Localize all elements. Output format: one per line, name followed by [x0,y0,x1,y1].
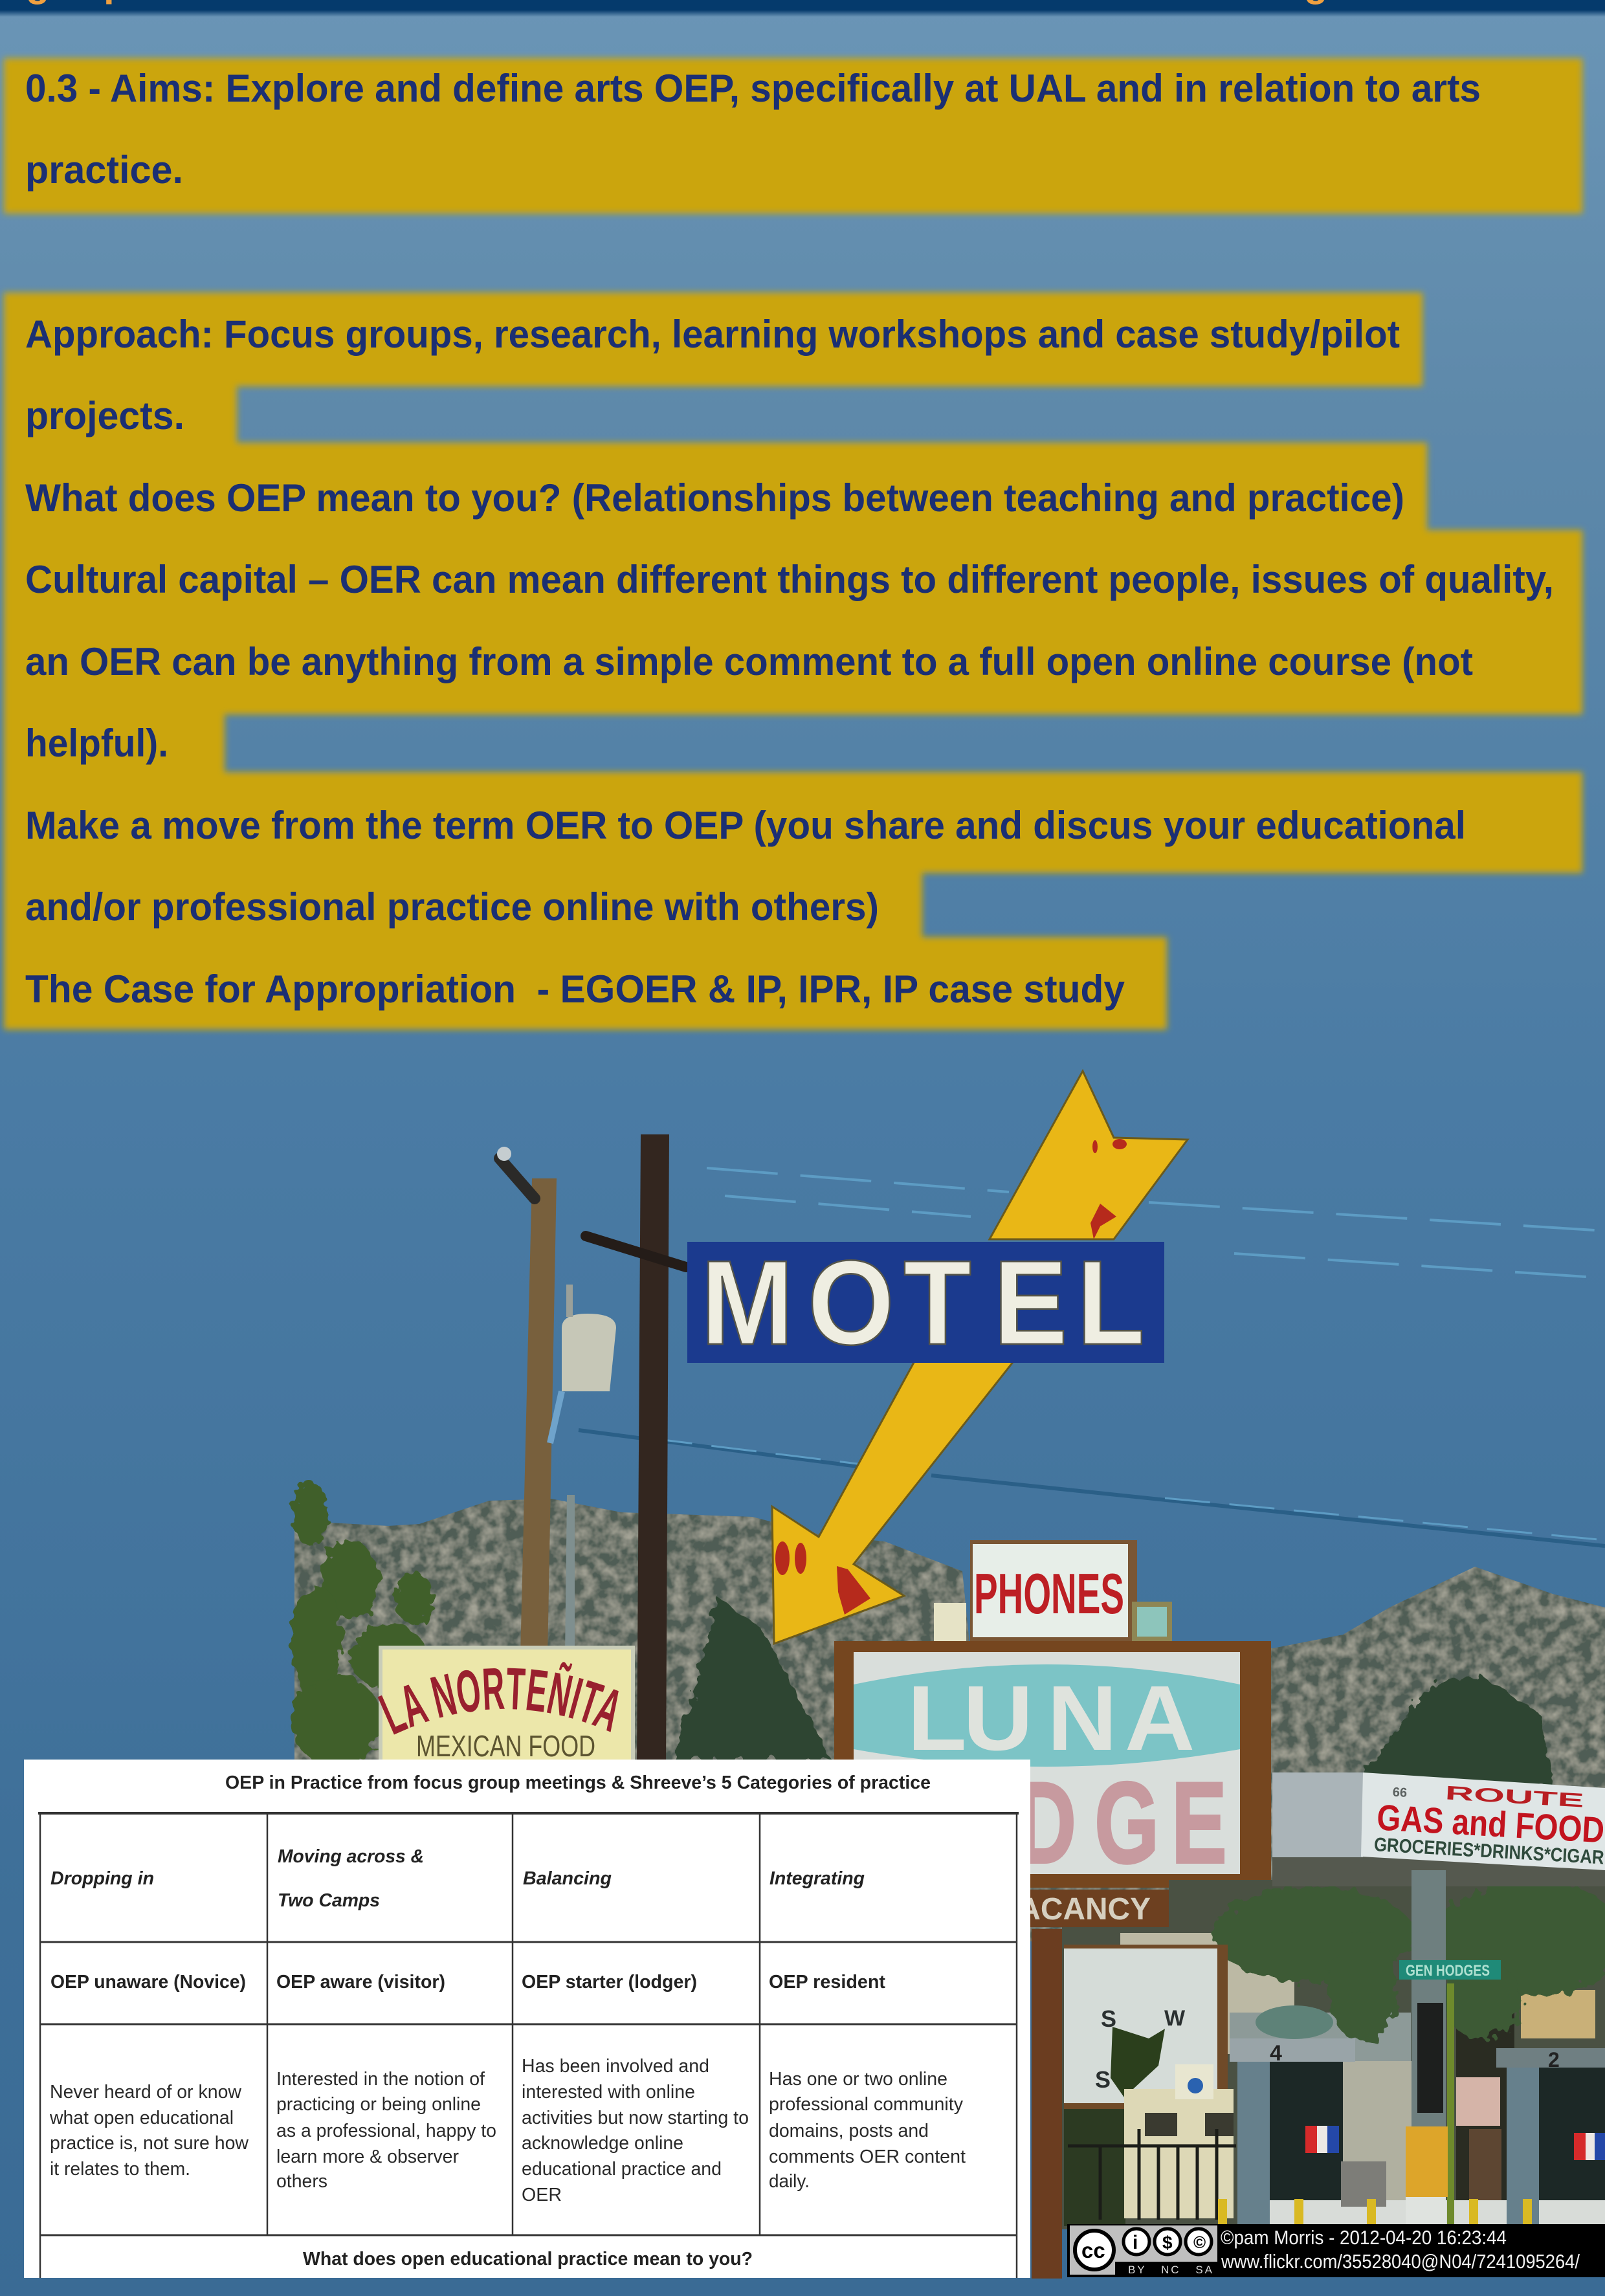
text block: approach: an OER can be anything from a simple comment to a full open online course (not [25,640,1473,683]
text block: approach: Approach: Focus groups, research, learning workshops and case study/pilot [25,313,1400,356]
motel sign: MOTEL [701,1235,1145,1369]
pump 2 [1496,2048,1605,2249]
yellow highlight blocks [4,58,1582,1030]
credit bar: © [1193,2233,1206,2252]
column text: aware: Interested in the notion of [276,2069,485,2090]
row: categories: Moving across & [278,1846,424,1867]
table title: OEP in Practice from focus group meetings & Shreeve’s 5 Categories of practice [225,1772,931,1793]
phones sign [934,1540,1172,1641]
luna lodge sign: LUNA [907,1667,1195,1770]
conifers behind signs [673,1598,1553,1786]
text block: approach: What does OEP mean to you? (Relationships between teaching and practice) [25,476,1404,520]
photo: roadside motel scene [289,1069,1605,2279]
trees behind gas station [1213,1880,1605,2042]
transformer [550,1285,616,1443]
text block: approach [25,313,1554,1011]
row: categories: Balancing [523,1868,612,1889]
gas station canopy [1272,1772,1605,1886]
la nortenita sign: LA NORTEÑITA [378,1662,619,1734]
caravan and fence [1068,2064,1236,2220]
top band with clipped heading [0,0,1605,17]
column text: starter: educational practice and [522,2159,722,2180]
column text: starter [522,2056,749,2205]
luna lodge sign: LODGE [841,1758,1227,1887]
panel: OEP in practice table [24,1760,1030,2278]
text block: approach: The Case for Appropriation - EGOER & IP, IPR, IP case study [25,967,1125,1011]
column text: aware: others [276,2171,327,2192]
street sign and centre props [1341,1960,1501,2226]
rust marks [775,1139,1127,1615]
canopy column [1411,1870,1446,2136]
row: categories: Integrating [769,1868,865,1889]
gas station canopy: ROUTE [1444,1782,1584,1812]
gas station canopy: 66 [1392,1785,1408,1800]
credit bar [1067,2224,1605,2277]
street lamp [565,1495,575,1657]
column text: unaware: it relates to them. [50,2159,190,2180]
white billboard: S [1101,2005,1116,2032]
text block: aims: 0.3 - Aims: Explore and define arts OEP, specifically at UAL and in relation to arts [25,67,1481,110]
left tree foliage [291,1482,434,1767]
column text: resident: comments OER content [769,2147,966,2167]
column text: resident: daily. [769,2171,810,2192]
text block: approach: Make a move from the term OER to OEP (you share and discus your educational [25,804,1466,847]
row: OEP levels [50,1972,885,1992]
white billboard: W [1164,2006,1186,2031]
phones sign: PHONES [974,1562,1124,1626]
column text: starter: interested with online [522,2082,695,2103]
white curb [1270,2200,1605,2225]
wires [579,1168,1605,1546]
arrow upper [990,1071,1188,1239]
row: OEP levels: OEP unaware (Novice) [50,1972,246,1992]
column text: starter: Has been involved and [522,2056,709,2077]
column text: unaware: practice is, not sure how [50,2133,249,2154]
row: categories [50,1846,865,1911]
credit bar: BY NC SA [1128,2264,1213,2276]
white billboard [1064,1945,1228,2109]
pump 4: 4 [1270,2041,1282,2066]
telephone pole [520,1178,557,1657]
column text: unaware [49,2082,249,2180]
text block: approach: Cultural capital – OER can mean different things to different people, issues of quality, [25,558,1554,601]
vacancy sign: VACANCY [1000,1892,1151,1926]
column text: resident [769,2069,966,2192]
text block: aims: practice. [25,148,183,192]
column text: aware: learn more & observer [276,2147,459,2167]
row: OEP levels: OEP aware (visitor) [276,1972,445,1992]
credit bar: $ [1162,2233,1173,2253]
brown post [1032,1929,1062,2279]
yellow bollards [1218,2199,1532,2226]
pump 4 [1230,2005,1355,2246]
credit bar: cc [1081,2238,1105,2262]
row: categories: Two Camps [278,1890,380,1911]
pump 2: 2 [1548,2048,1560,2071]
arrow lower [772,1359,1015,1644]
credit bar: i [1133,2232,1138,2253]
white billboard: S [1095,2066,1111,2093]
column text: aware: as a professional, happy to [276,2121,496,2141]
column text: unaware: what open educational [49,2108,234,2128]
row: OEP levels: OEP resident [769,1972,885,1992]
table footer question: What does open educational practice mean to you? [303,2249,753,2269]
column text: starter: acknowledge online [522,2133,683,2154]
text block: approach: and/or professional practice online with others) [25,885,879,929]
column text: resident: Has one or two online [769,2069,947,2090]
luna lodge sign [834,1641,1271,1888]
lower street background [1062,1880,1605,2229]
mountains [294,1499,1605,1941]
la nortenita sign: MEXICAN FOOD [416,1729,595,1763]
text block: aims [25,67,1481,192]
column text: resident: professional community [769,2094,963,2115]
motel pole [637,1134,669,1767]
column text: starter: activities but now starting to [522,2108,749,2128]
table grid [38,1813,1019,2278]
text block: approach: helpful). [25,722,168,765]
row: OEP levels: OEP starter (lodger) [522,1972,697,1992]
text block: approach: projects. [25,394,184,437]
row: categories: Dropping in [50,1868,154,1889]
column text: unaware: Never heard of or know [50,2082,242,2103]
column text: aware: practicing or being online [276,2094,481,2115]
column text: starter: OER [522,2185,562,2205]
credit bar: ©pam Morris - 2012-04-20 16:23:44 [1221,2226,1507,2249]
street sign and centre props: GEN HODGES [1406,1962,1490,1980]
column text: resident: domains, posts and [769,2121,929,2141]
column text: aware [276,2069,496,2192]
